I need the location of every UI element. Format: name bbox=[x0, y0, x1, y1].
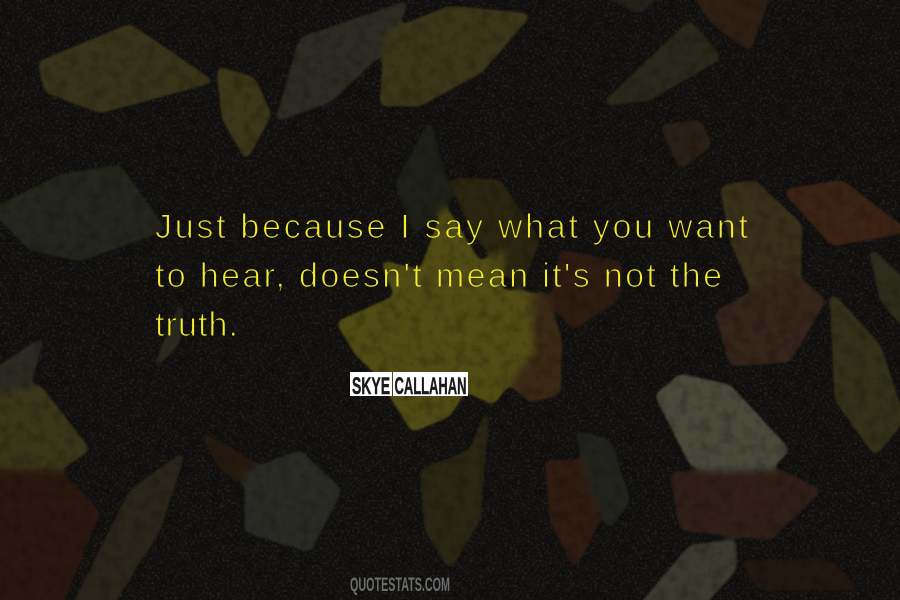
quote line 2: to hear, doesn't mean it's not the bbox=[155, 257, 722, 295]
quote text bbox=[155, 208, 749, 344]
quote line 3: truth. bbox=[155, 306, 238, 344]
quote line 1: Just because I say what you want bbox=[155, 208, 749, 246]
site watermark: QUOTESTATS.COM bbox=[350, 575, 450, 596]
author first name: SKYE bbox=[352, 373, 390, 400]
author label bbox=[350, 372, 468, 400]
author surname: CALLAHAN bbox=[394, 373, 466, 400]
